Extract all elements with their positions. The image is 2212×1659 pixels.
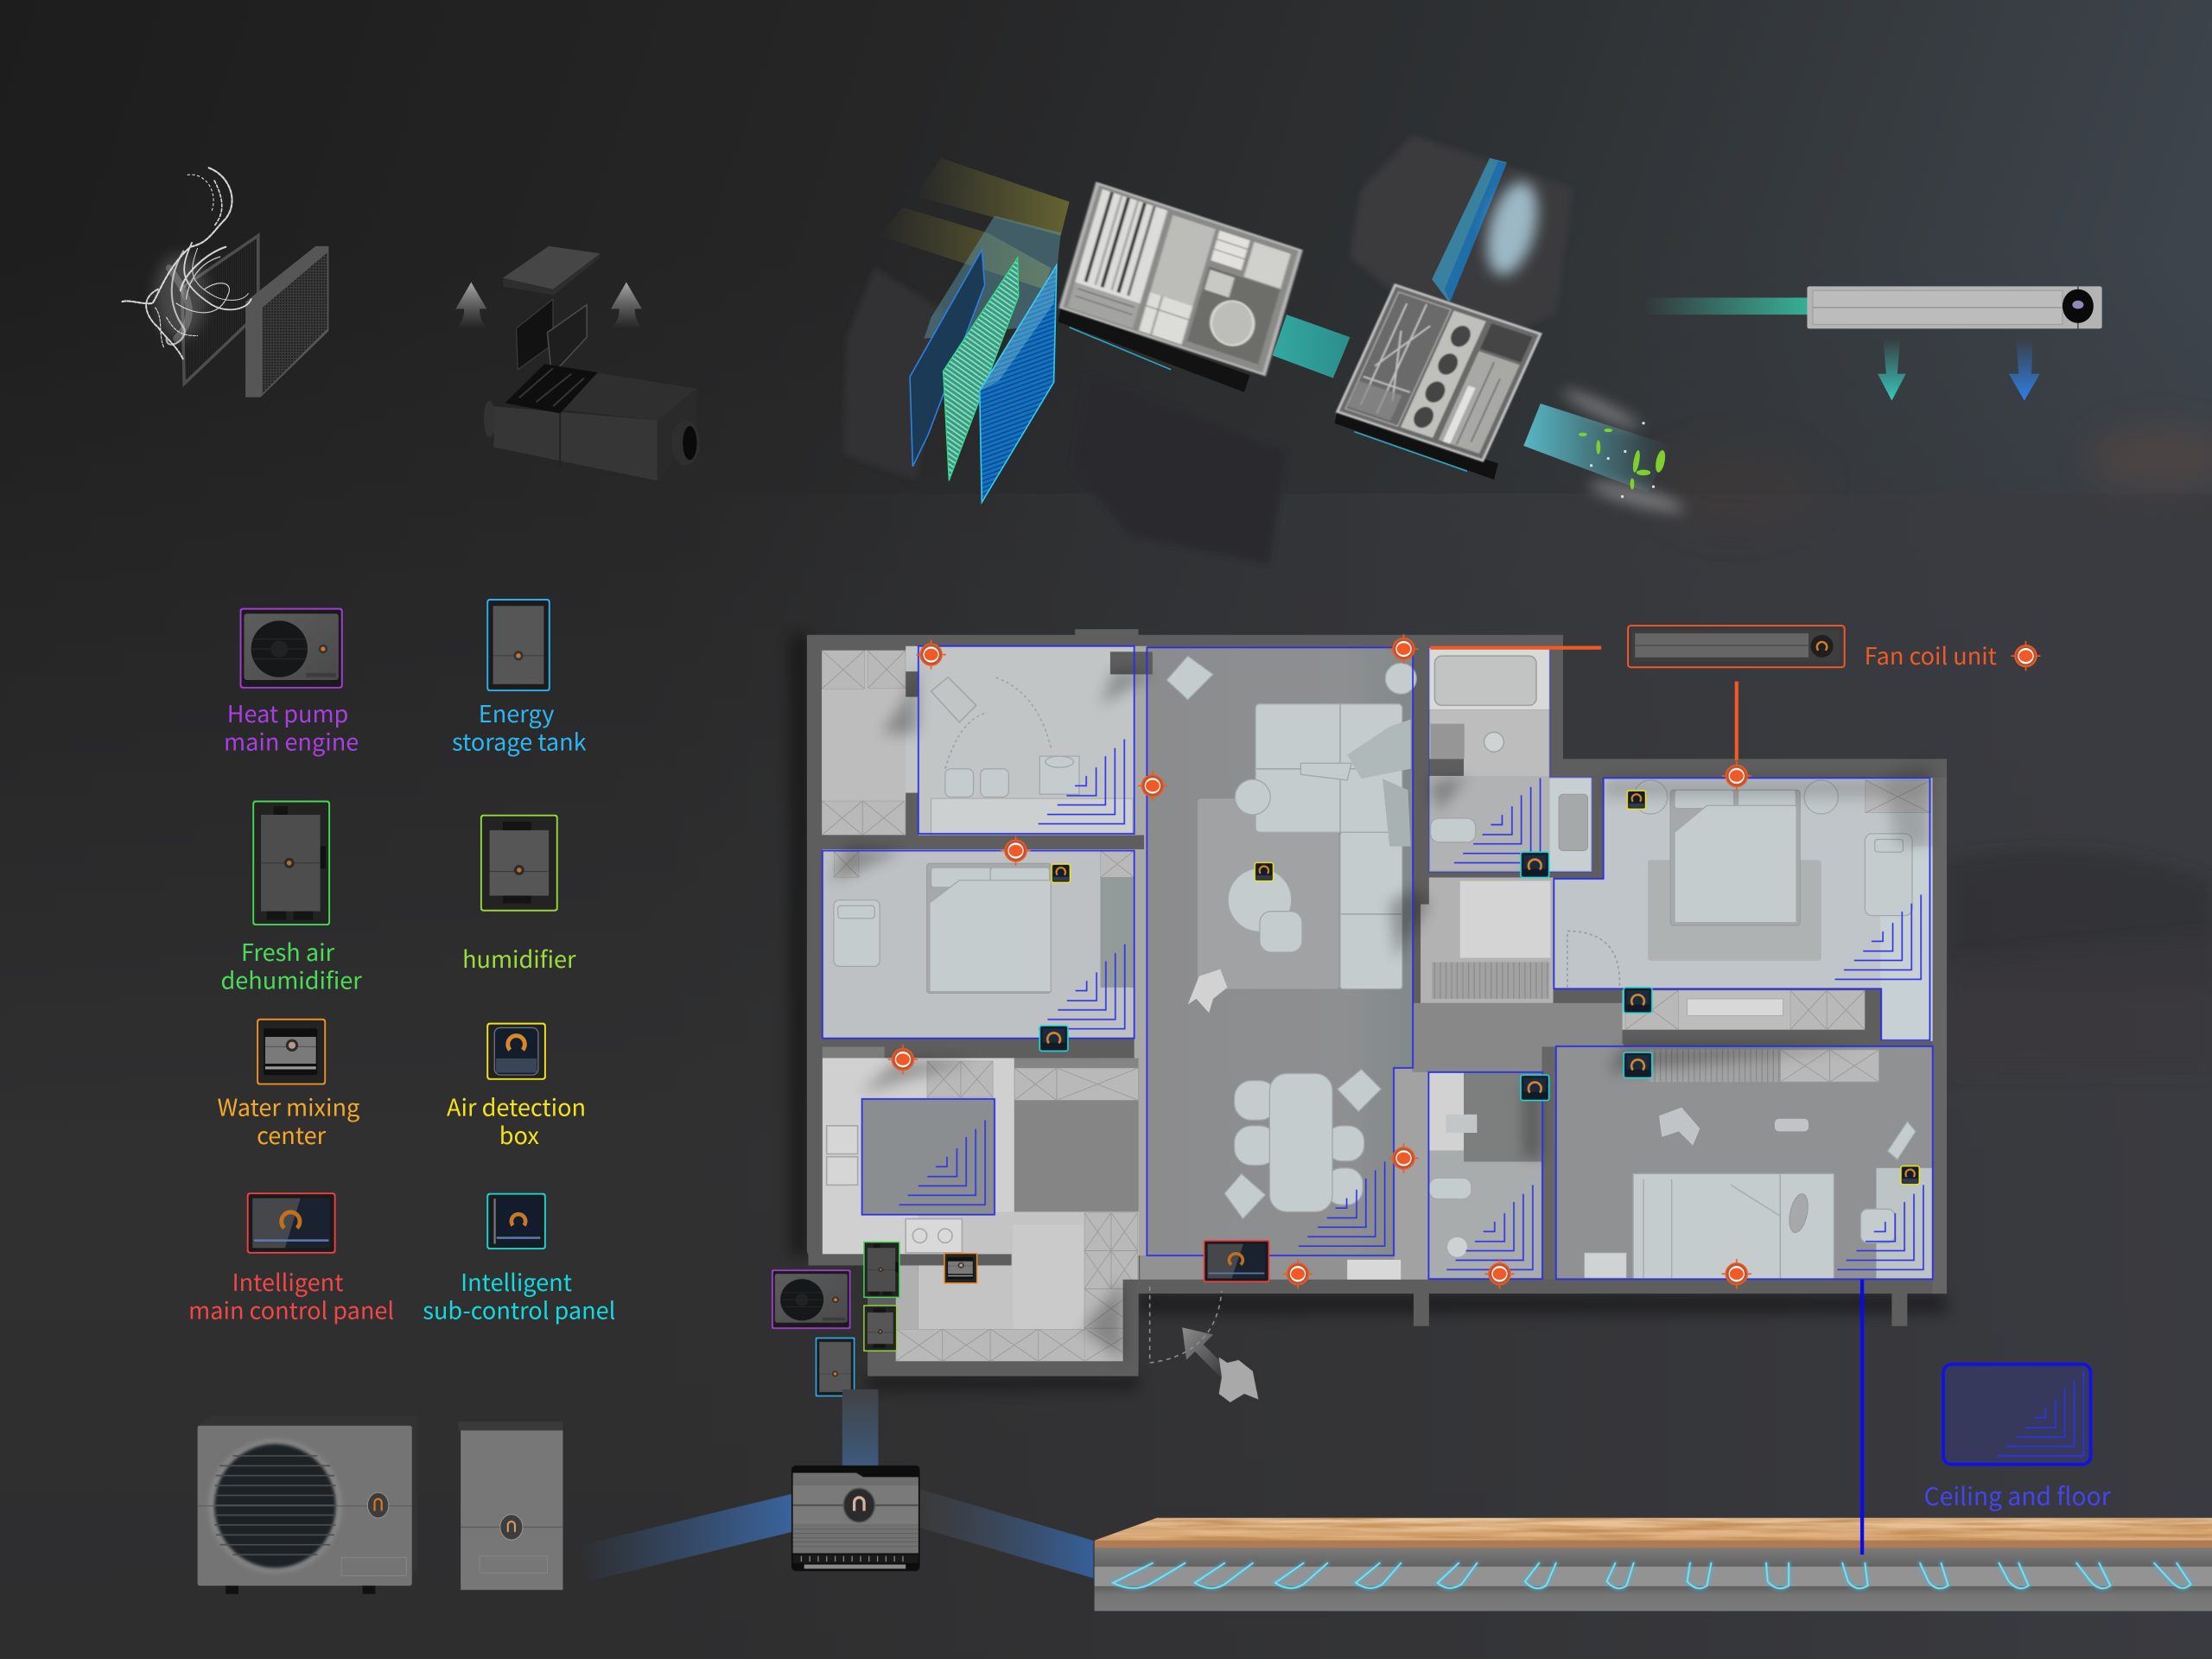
cooling fin with glow [1432,158,1547,302]
interior walls [809,652,1947,1376]
legend: air detection box [447,1023,586,1151]
panel: fan coil top [1643,286,2102,401]
icon: target legend [2011,641,2041,671]
blue connector [1861,1280,1863,1554]
unit body [484,364,700,480]
teal air stream [1643,297,1808,315]
energy storage tank unit [459,1421,563,1590]
unit 2 cutaway [1334,285,1541,480]
kitchen fixtures [827,1126,962,1253]
wood edge [1095,1541,2212,1548]
screed layers [1095,1548,2212,1611]
legend: water mixing center: center [257,1117,327,1151]
filter cartridges [517,299,587,375]
rear honeycomb filter [245,246,328,397]
orange supply lines [1431,648,1737,760]
legend: air detection box: box [499,1117,539,1151]
legend: energy storage tank: Energy [479,696,554,729]
panel: floor plan [772,629,1947,1402]
heat pump unit [198,1415,417,1594]
legend: fresh air dehumidifier: Fresh air [241,934,335,968]
panel: filter module [121,168,328,397]
exit duct with leaves [1523,385,1687,518]
radiant zones outlines [823,646,1933,1279]
legend: intelligent sub-control panel: sub-control panel [423,1293,615,1326]
fan coil unit legend [1628,626,2041,671]
plan equipment [772,1241,1269,1396]
legend: intelligent sub-control panel [423,1194,615,1326]
panel: dehumidifier exploded [455,246,700,480]
floor section [1095,1518,2212,1611]
bathroom fixtures [1429,656,1536,1257]
entry door and arrow [1150,1287,1258,1402]
distribution beams [576,1389,1093,1581]
legend: energy storage tank: storage tank [452,724,587,758]
plan shadows outside [790,635,1947,1389]
icon: teal down arrow [1878,339,1906,401]
yellow air streams [879,158,1070,289]
legend: intelligent sub-control panel: Intelligent [461,1264,572,1298]
legend: water mixing center: Water mixing [217,1089,359,1122]
fan coil body [1807,286,2102,328]
air detection boxes [1052,791,1919,1185]
water splash [121,168,251,359]
fan coil label: Fan coil unit [1865,638,1997,671]
legend: intelligent main control panel [188,1193,394,1326]
room floors [822,646,1933,1362]
room 1 furniture [931,677,1133,836]
radiant spirals [899,740,1923,1269]
icon: blue down arrow [2009,339,2040,401]
ceiling label: Ceiling and floor [1924,1478,2111,1513]
legend: fresh air dehumidifier [221,801,362,995]
cabinets [822,651,1931,1362]
ghost casings [843,136,1573,564]
beam: left [576,1494,791,1581]
sub-control panels [1039,852,1652,1100]
wall shadows [832,663,1933,1362]
beam: right [919,1489,1093,1578]
living furniture [1166,656,1416,1013]
lower bedroom furniture [1584,1108,1916,1279]
outer walls [807,629,1947,1376]
panel: legend [188,600,615,1326]
legend: humidifier: humidifier [462,941,576,975]
legend: intelligent main control panel: Intelligent [232,1264,343,1298]
ceiling and floor legend [1862,1280,2111,1554]
legend: fresh air dehumidifier: dehumidifier [221,962,362,995]
bedroom 2 furniture [834,863,1135,993]
top cover [503,246,600,295]
beam: vertical [842,1389,878,1465]
water mixing center unit [791,1465,919,1571]
legend: water mixing center [217,1020,359,1151]
heating loops [1113,1563,2191,1588]
unit 1 cutaway [1058,183,1300,392]
filter planes [910,216,1061,502]
fan coil targets [888,634,1751,1288]
icon: up arrow left [455,283,486,328]
wood surface [1095,1518,2212,1541]
legend: heat pump main engine: Heat pump [227,696,348,729]
ceiling icon [1943,1364,2091,1465]
legend: energy storage tank [452,600,587,758]
legend: air detection box: Air detection [447,1089,586,1122]
icon: up arrow right [611,283,642,328]
dining furniture [1224,1070,1381,1219]
master bedroom furniture [1559,780,1912,1016]
legend: intelligent main control panel: main control panel [188,1293,394,1326]
teal duct [1273,315,1350,378]
legend: heat pump main engine: main engine [224,724,359,758]
legend: humidifier [462,816,576,975]
panel: fresh air cutaway units [843,136,1687,564]
legend: heat pump main engine [224,608,359,758]
fan coil icon [1628,626,1845,667]
front filter frame [182,236,258,384]
